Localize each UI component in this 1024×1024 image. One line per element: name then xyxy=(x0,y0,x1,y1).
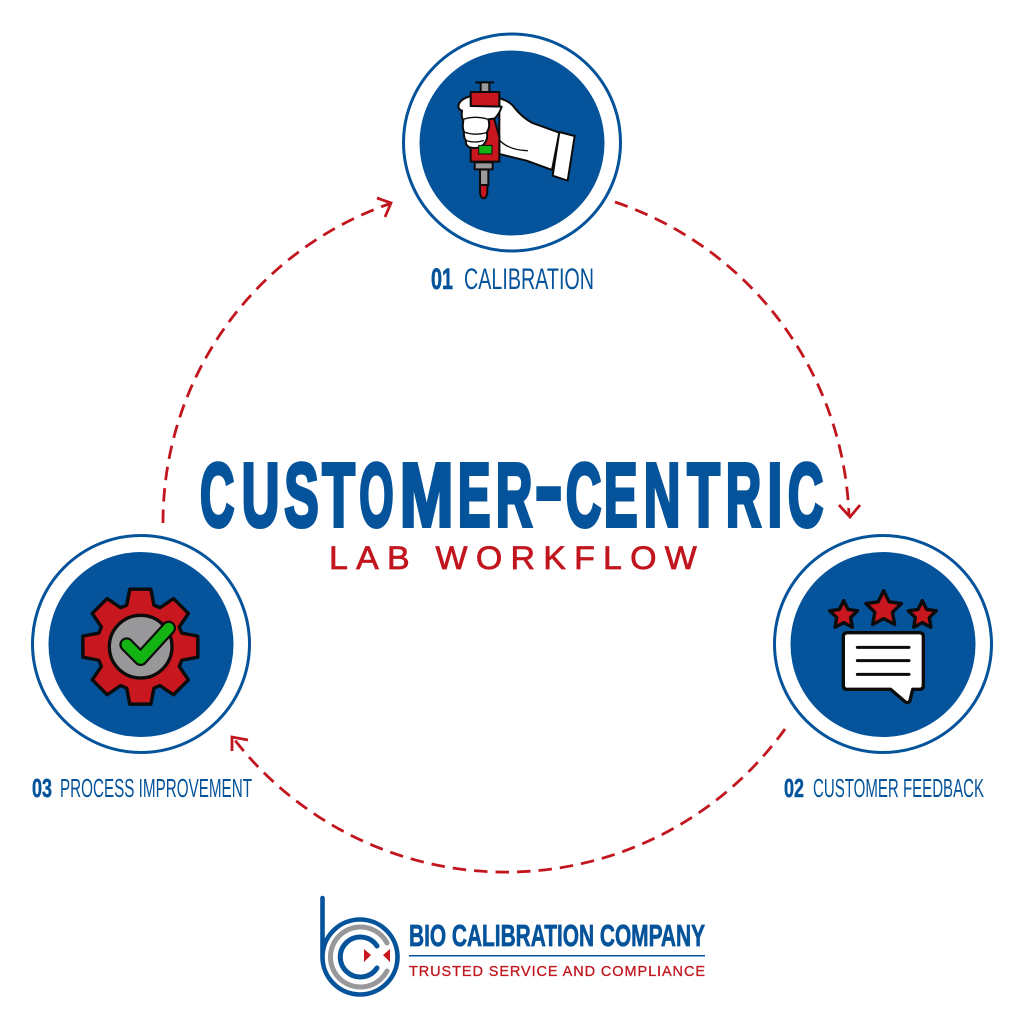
icon: stars and speech bubble xyxy=(830,591,936,703)
label: 01 calibration: 01 xyxy=(431,263,453,296)
node: process improvement xyxy=(32,536,250,752)
title: R xyxy=(496,446,532,546)
title: T xyxy=(322,446,355,546)
speech bubble xyxy=(843,633,923,703)
check mark xyxy=(127,628,169,659)
title: M xyxy=(400,446,453,546)
node: customer feedback xyxy=(774,536,992,752)
logo: Bio Calibration Company xyxy=(322,898,705,994)
gear xyxy=(83,589,198,704)
title: E xyxy=(458,446,491,546)
star: right xyxy=(908,601,936,627)
subtitle: LAB WORKFLOW xyxy=(329,540,697,576)
arrow: process improvement to calibration xyxy=(163,198,391,523)
label: 01 calibration: CALIBRATION xyxy=(464,263,594,296)
title: O xyxy=(359,446,394,546)
logo name: BIO CALIBRATION COMPANY xyxy=(409,918,705,953)
logo tagline: TRUSTED SERVICE AND COMPLIANCE xyxy=(409,964,705,980)
title: I xyxy=(768,446,782,546)
title: E xyxy=(604,446,638,546)
title: N xyxy=(644,446,680,546)
title: R xyxy=(726,446,761,546)
node: calibration xyxy=(404,34,620,251)
title: - xyxy=(535,437,562,537)
arrow: customer feedback to process improvement xyxy=(232,729,785,872)
icon: gear with check mark xyxy=(83,589,198,704)
title: C xyxy=(200,446,234,546)
star: left xyxy=(830,601,858,627)
label: 02 customer feedback: 02 xyxy=(784,773,804,803)
arrow: calibration to customer feedback xyxy=(615,202,860,517)
label: 03 process improvement xyxy=(32,773,252,803)
icon: gloved hand holding pipette xyxy=(458,82,575,198)
label: 03 process improvement: 03 xyxy=(32,773,52,803)
label: 03 process improvement: PROCESS IMPROVEMENT xyxy=(60,773,252,803)
title: S xyxy=(284,446,319,546)
title: C xyxy=(788,446,823,546)
star: middle xyxy=(866,591,901,624)
logo mark xyxy=(322,898,398,994)
title: T xyxy=(687,446,720,546)
title: C xyxy=(566,446,601,546)
title: U xyxy=(242,446,280,546)
label: 01 calibration xyxy=(431,263,594,296)
